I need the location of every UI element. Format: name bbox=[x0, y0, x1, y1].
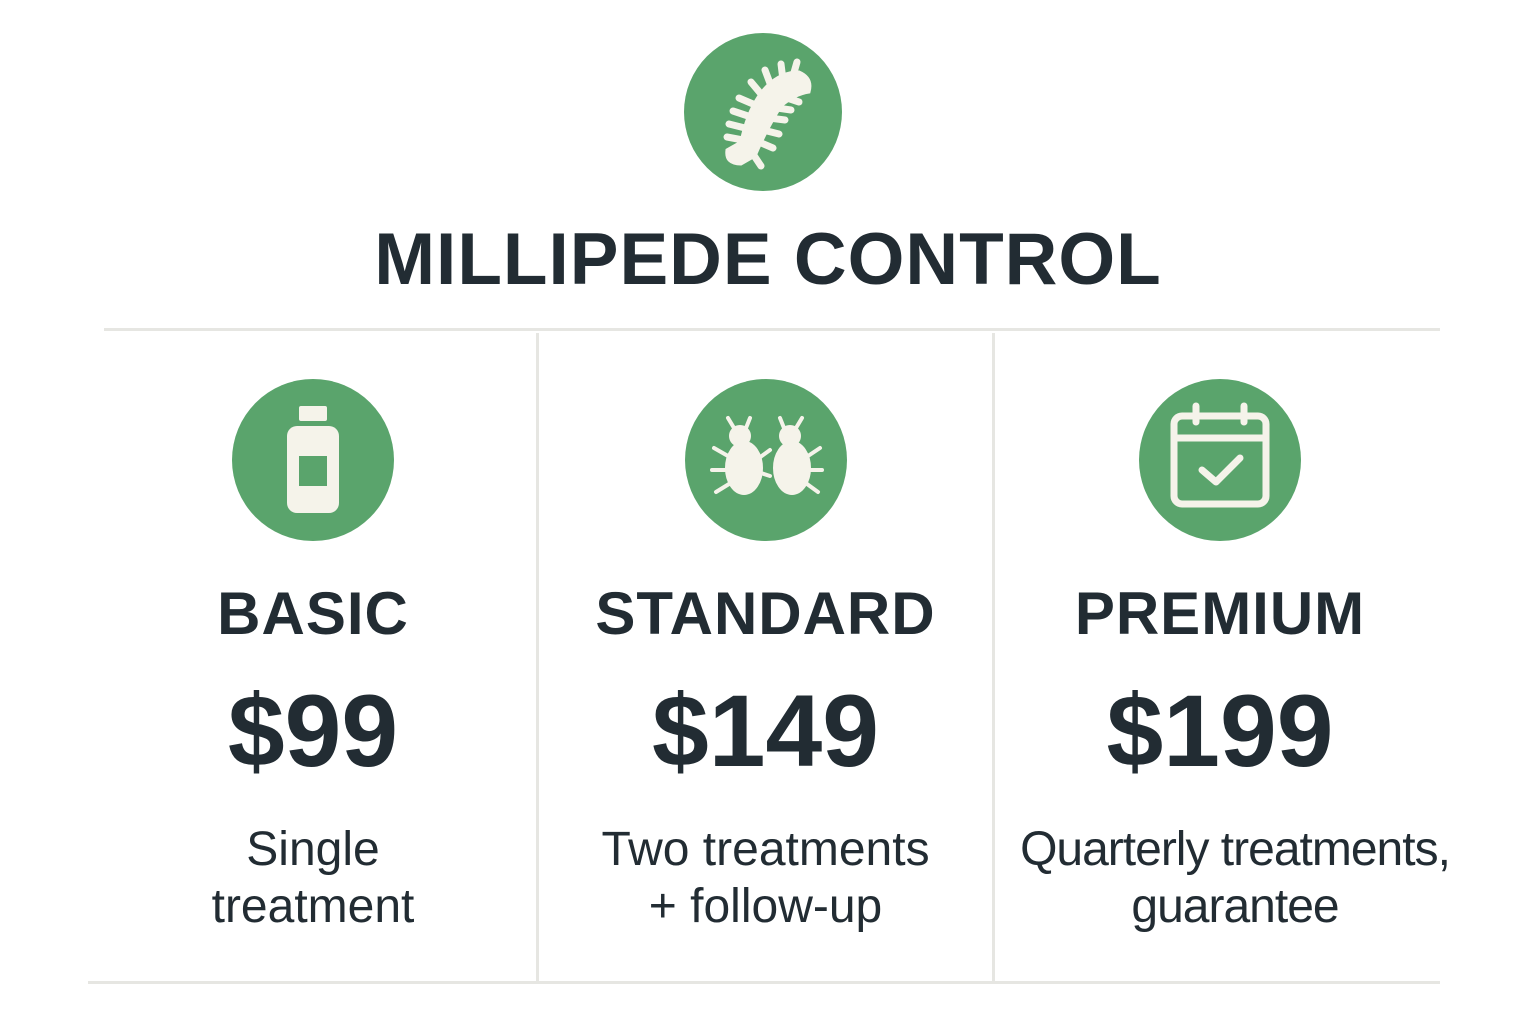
price: $99: $99 bbox=[228, 674, 398, 788]
heading: PREMIUM: PREMIUM bbox=[1075, 580, 1365, 647]
description: guarantee bbox=[1131, 880, 1339, 933]
description: + follow-up bbox=[649, 880, 882, 933]
description: treatment bbox=[212, 880, 414, 933]
panel: premium bbox=[1020, 379, 1450, 933]
title: MILLIPEDE CONTROL bbox=[374, 219, 1162, 300]
description bbox=[601, 823, 930, 933]
heading: STANDARD: STANDARD bbox=[595, 580, 936, 647]
description: Two treatments bbox=[601, 823, 930, 876]
icon: bottle bbox=[232, 379, 394, 541]
icon: calendar bbox=[1139, 379, 1301, 541]
description: Single bbox=[246, 823, 380, 876]
panel: basic bbox=[212, 379, 414, 933]
icon: millipede bbox=[684, 33, 842, 191]
icon: bugs bbox=[685, 379, 847, 541]
price: $149: $149 bbox=[652, 674, 879, 788]
heading: BASIC: BASIC bbox=[217, 580, 409, 647]
description bbox=[212, 823, 414, 933]
description: Quarterly treatments, bbox=[1020, 823, 1450, 876]
price: $199: $199 bbox=[1107, 674, 1333, 788]
description bbox=[1020, 823, 1450, 933]
panel: standard bbox=[595, 379, 936, 933]
